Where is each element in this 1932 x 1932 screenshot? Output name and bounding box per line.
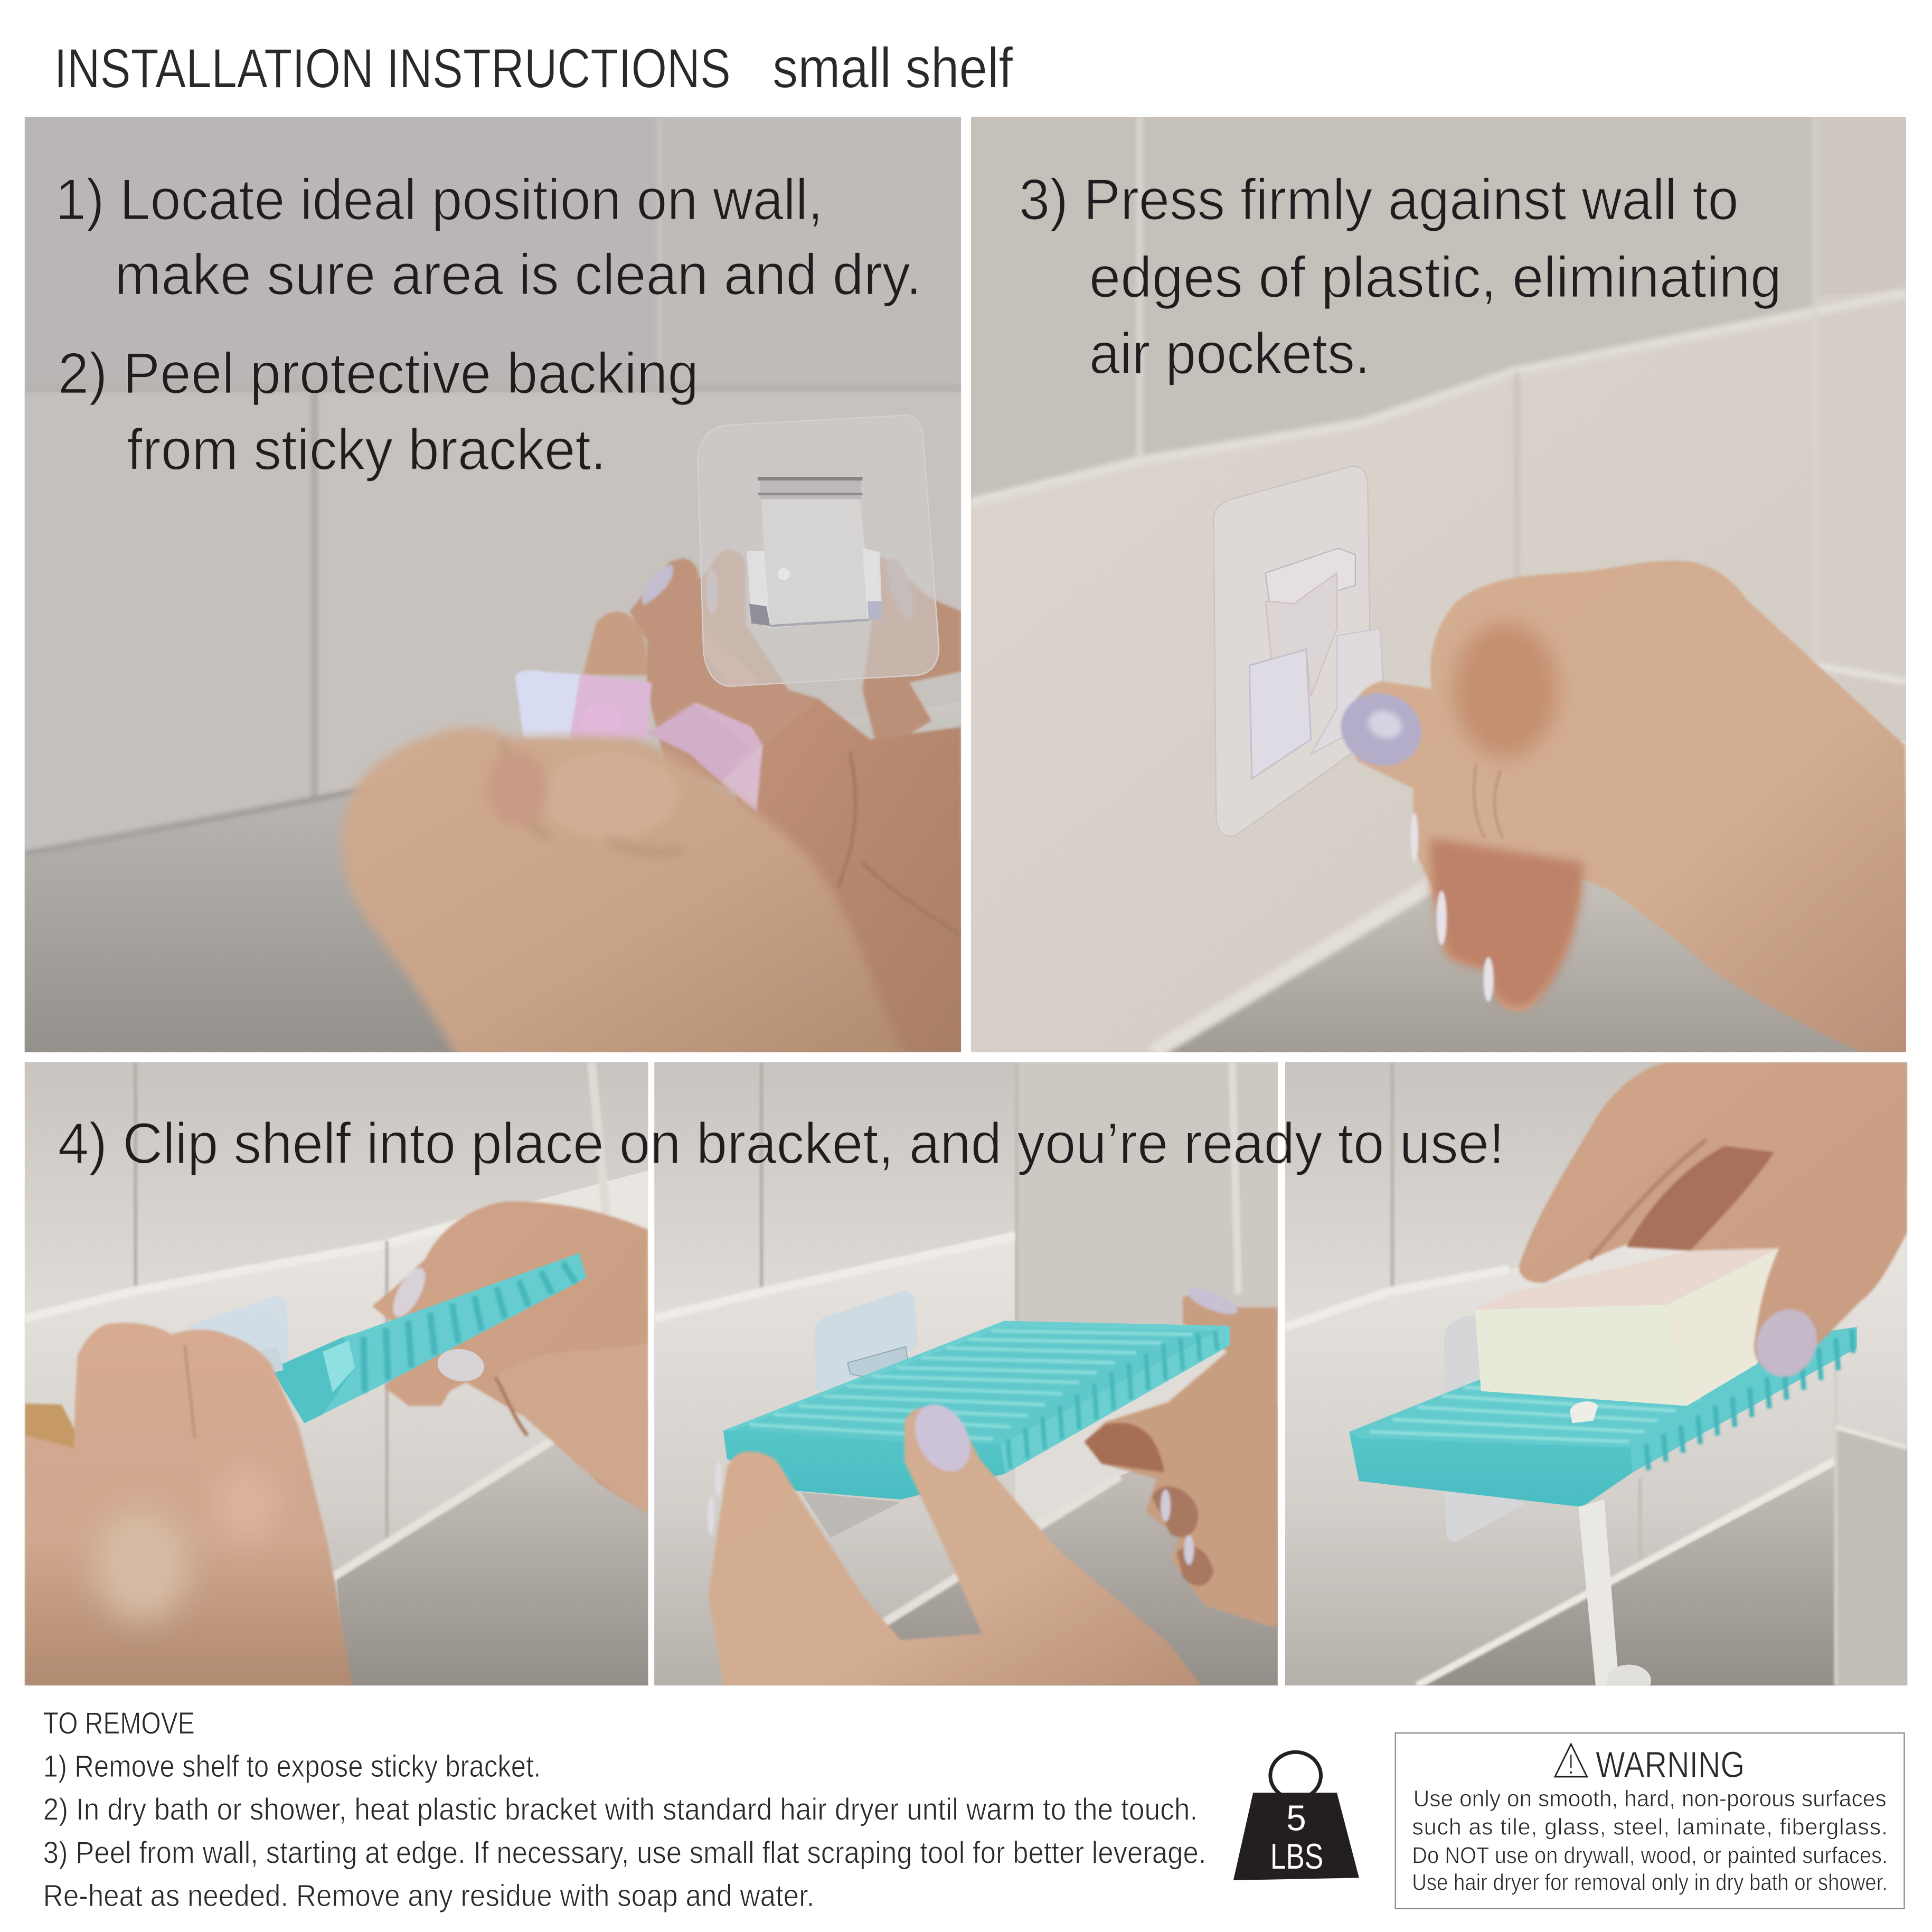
removal instructions: TO REMOVE: [43, 1706, 195, 1740]
panel: photo finished shelf with soap: [1285, 1062, 1907, 1697]
warning line 2: such as tile, glass, steel, laminate, fiberglass.: [1412, 1815, 1888, 1840]
wall tiles: [25, 117, 961, 1052]
warning line 4: Use hair dryer for removal only in dry bath or shower.: [1412, 1870, 1888, 1896]
right hand palm and fingers: [583, 550, 961, 1052]
removal instructions: [43, 1706, 1207, 1913]
panel: photo peeling backing from bracket: [25, 117, 961, 1060]
panel: photo clipping shelf, angled view: [654, 1062, 1278, 1685]
step 3 text: [1019, 167, 1782, 386]
wall tiles: [1285, 1062, 1907, 1685]
wall tiles: [654, 1062, 1278, 1685]
removal step 1: 1) Remove shelf to expose sticky bracket.: [43, 1749, 541, 1784]
rope: [1570, 1401, 1651, 1697]
left hand foreground: [343, 728, 906, 1060]
removal step 3 continued: Re-heat as needed. Remove any residue with soap and water.: [43, 1879, 814, 1913]
step 3 text: 3) Press firmly against wall to: [1019, 167, 1739, 232]
clear bracket on wall: [1214, 466, 1385, 836]
right hand: [372, 1201, 648, 1514]
step 2 text: [58, 341, 699, 482]
warning box: [1396, 1733, 1904, 1909]
icon: 5 lbs weight: [1233, 1752, 1359, 1880]
teal shelf: [723, 1321, 1230, 1500]
backing paper: [515, 670, 762, 812]
bracket and clip: [801, 1291, 918, 1538]
wall tiles: [25, 1062, 648, 1685]
panel: photo pressing bracket against wall: [971, 117, 1910, 1052]
removal step 2: 2) In dry bath or shower, heat plastic bracket with standard hair dryer until warm to the touch.: [43, 1793, 1198, 1827]
step 3 third line: air pockets.: [1089, 322, 1370, 386]
title: INSTALLATION INSTRUCTIONS: [54, 38, 731, 100]
wall tiles: [971, 117, 1906, 1052]
nail on thumb: [436, 1346, 486, 1384]
teal shelf: [260, 1253, 587, 1423]
hand pressing bracket: [1332, 561, 1910, 1052]
icon: warning triangle: [1555, 1744, 1587, 1777]
warning line 1: Use only on smooth, hard, non-porous surfaces: [1413, 1786, 1887, 1812]
subtitle: small shelf: small shelf: [772, 36, 1013, 100]
panel: photo clipping shelf, side view: [25, 1062, 648, 1685]
left hand foreground: [25, 1323, 352, 1685]
step 3 second line: edges of plastic, eliminating: [1089, 245, 1782, 309]
icon: 5 lbs weight: LBS: [1270, 1837, 1323, 1877]
left hand foreground: [707, 1395, 1201, 1685]
step 1 text: [55, 167, 921, 307]
clear adhesive bracket: [698, 415, 939, 686]
warning heading: WARNING: [1596, 1744, 1745, 1785]
right hand: [1085, 1283, 1278, 1626]
removal step 3: 3) Peel from wall, starting at edge. If necessary, use small flat scraping tool for better leverage.: [43, 1835, 1207, 1870]
teal shelf: [1349, 1327, 1857, 1507]
bracket: [190, 1296, 288, 1368]
bar of soap: [1475, 1248, 1787, 1406]
icon: 5 lbs weight: 5: [1286, 1798, 1306, 1838]
hand holding soap: [1519, 1062, 1907, 1386]
step 1 text: 1) Locate ideal position on wall,: [55, 167, 823, 232]
warning line 3: Do NOT use on drywall, wood, or painted surfaces.: [1412, 1843, 1888, 1868]
step 1 second line: make sure area is clean and dry.: [115, 243, 921, 307]
step 2 text: 2) Peel protective backing: [58, 341, 699, 406]
step 4 text: 4) Clip shelf into place on bracket, and you’re ready to use!: [58, 1111, 1504, 1176]
bracket behind shelf: [1444, 1314, 1526, 1542]
step 2 second line: from sticky bracket.: [127, 418, 606, 482]
